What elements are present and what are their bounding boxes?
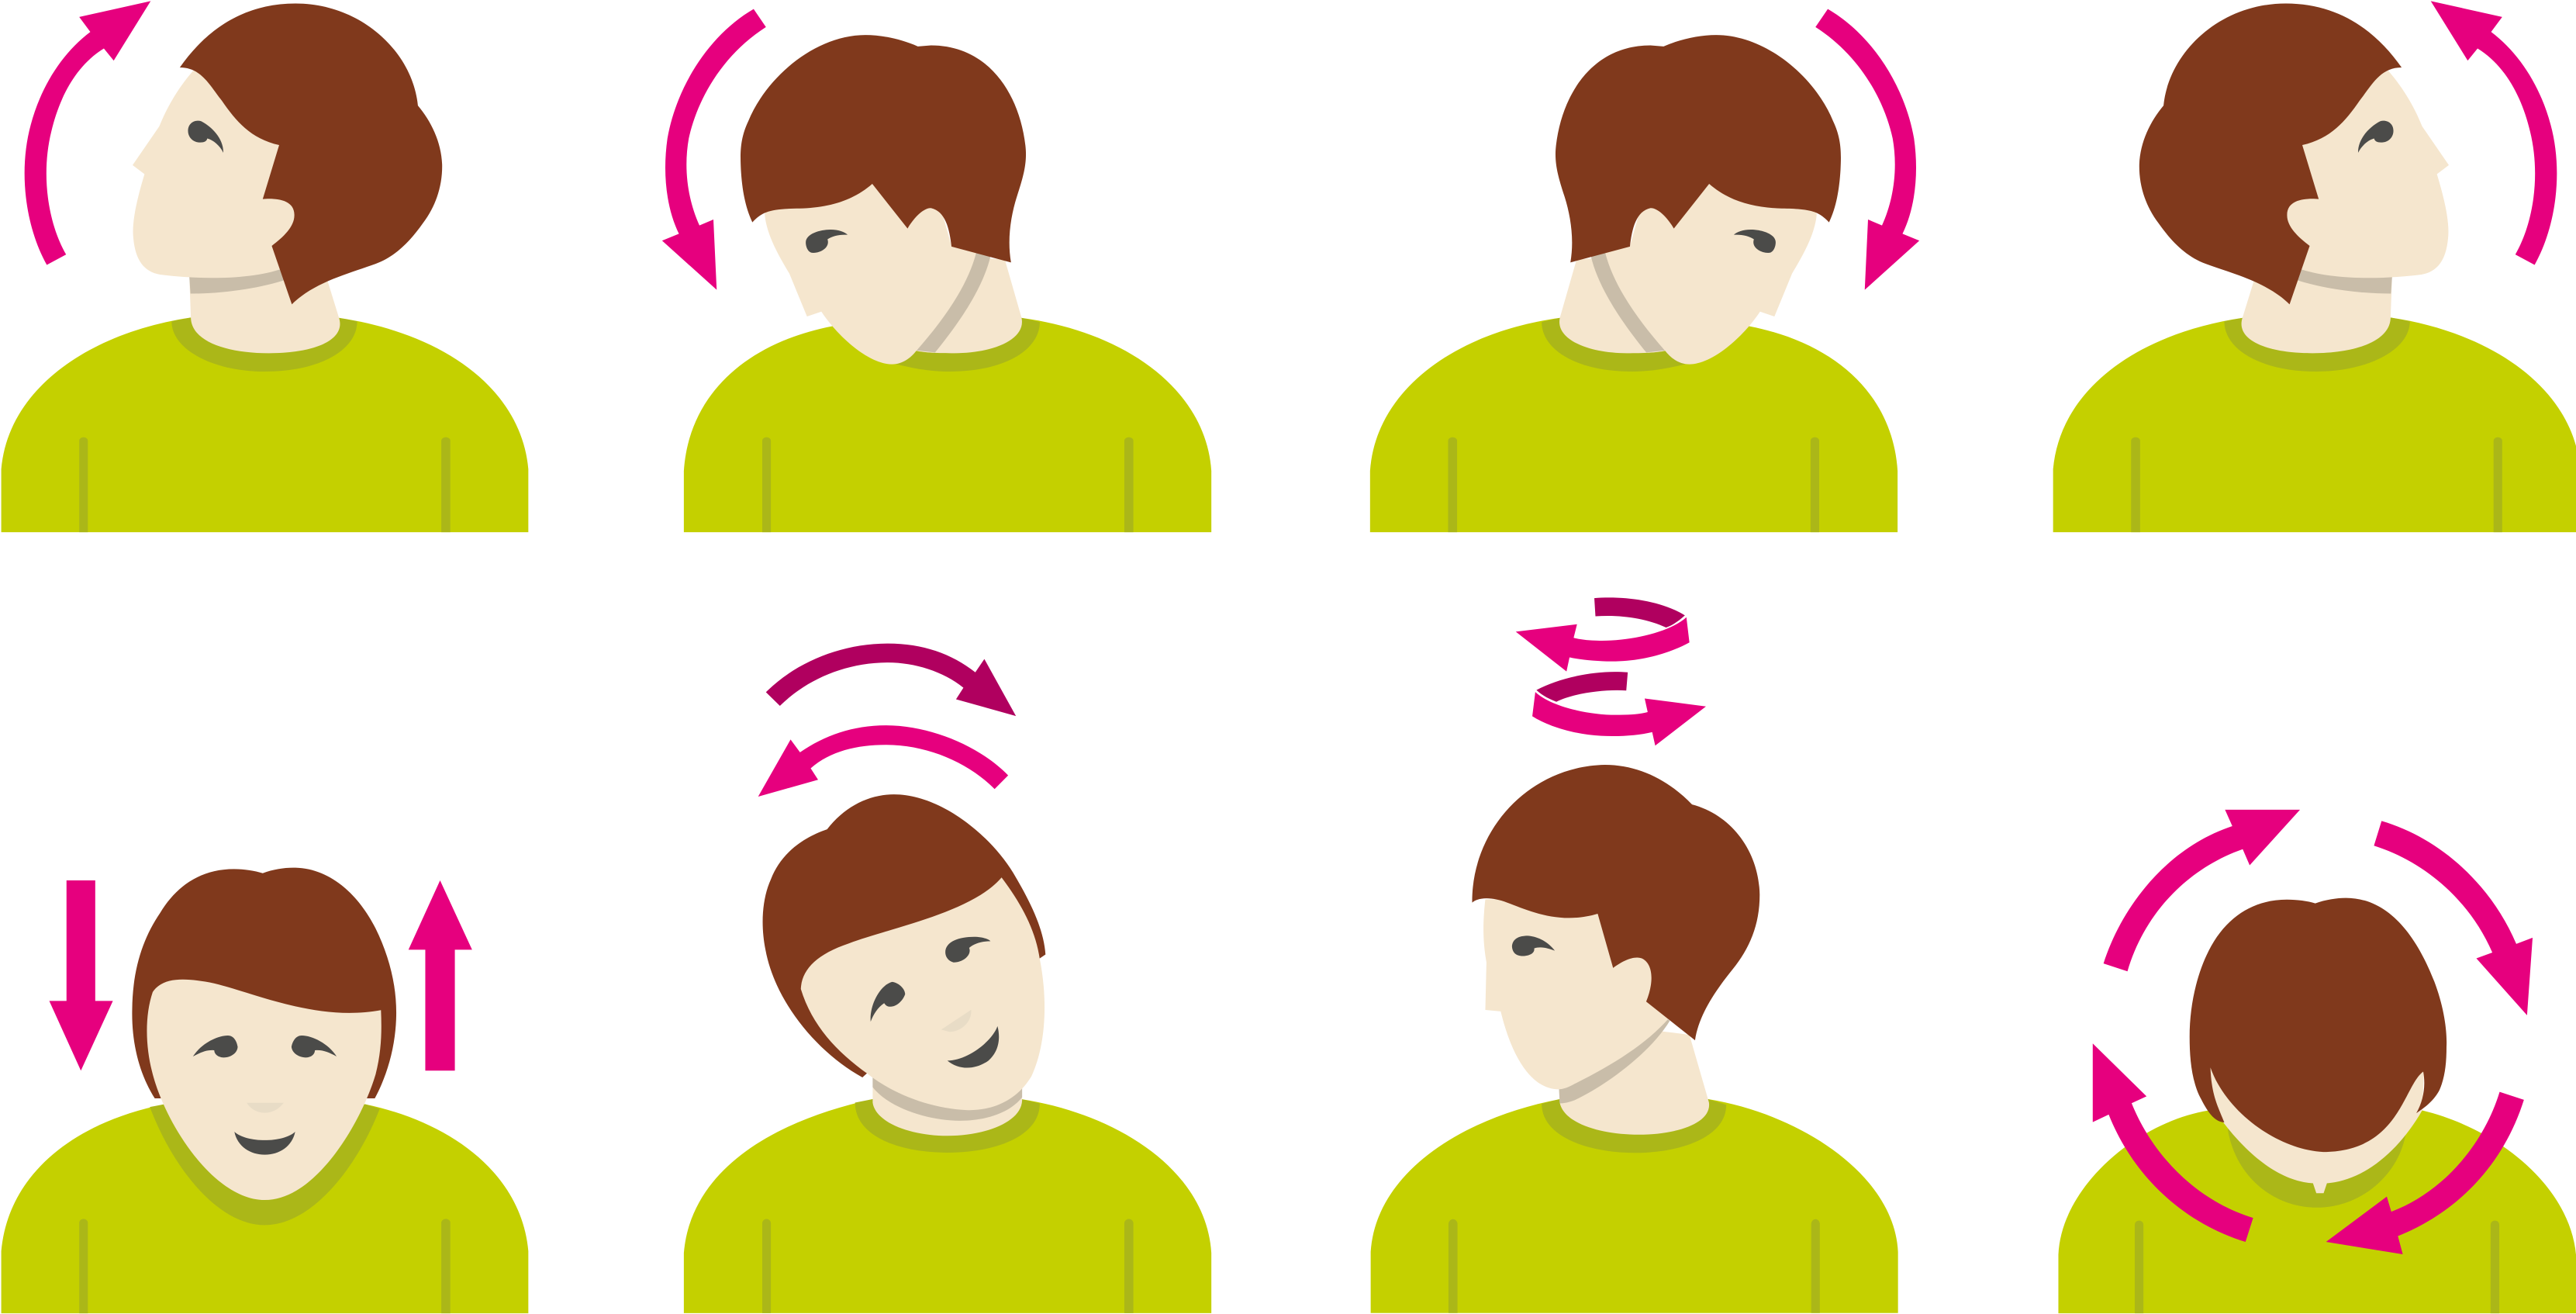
neck shadow [1591, 253, 1665, 352]
face [1605, 173, 1817, 365]
neck shadow [2296, 268, 2392, 294]
eye [2358, 121, 2394, 153]
neck [914, 256, 1022, 353]
eye [188, 121, 223, 153]
hair [180, 3, 442, 304]
back hair [132, 868, 396, 1098]
upper eye [945, 937, 990, 963]
eye [1734, 230, 1776, 253]
hair [2190, 898, 2447, 1152]
arrow: bottom-left [2093, 1043, 2253, 1242]
torso [2, 1105, 528, 1313]
neck [2242, 263, 2392, 353]
arrow: up [409, 880, 472, 1070]
face [1483, 899, 1687, 1089]
neck shadow [189, 268, 285, 294]
face [2253, 69, 2449, 278]
eye [806, 230, 848, 253]
torso [1371, 1099, 1898, 1313]
panel: nodding head, front view [2, 868, 528, 1313]
arrow: curved upward [25, 1, 150, 265]
torso [2, 317, 528, 532]
shirt seams [2131, 437, 2502, 532]
shirt seams [762, 1219, 1134, 1313]
nose [247, 1103, 284, 1113]
arrow: curved downward [1815, 9, 1919, 290]
collar [171, 317, 357, 372]
face [2211, 1067, 2424, 1183]
hair [741, 35, 1026, 262]
panel: head bowed, facing right [1370, 9, 1919, 532]
face [765, 173, 976, 365]
torso [684, 1099, 1211, 1313]
panel: head bowed, facing left [662, 9, 1211, 532]
shirt seams [1448, 437, 1819, 532]
shirt seams [79, 437, 451, 532]
shirt seams [1449, 1219, 1820, 1313]
mouth [948, 1026, 999, 1068]
shirt seams [762, 437, 1134, 532]
neck tip [2312, 1181, 2328, 1193]
hair [763, 794, 1045, 1077]
torso [684, 318, 1211, 532]
shirt seams [2135, 1221, 2499, 1313]
face [133, 69, 329, 278]
arrow: curved downward [662, 9, 766, 290]
arrow: top-left [2104, 810, 2300, 971]
arrow: top-right [2374, 821, 2533, 1015]
collar [2228, 1119, 2406, 1208]
panel: head rotating, profile view [1371, 597, 1898, 1313]
collar [150, 1105, 380, 1225]
panel: head circling, bowed [2058, 810, 2576, 1313]
arrow: lower ribbon, to the right [1532, 692, 1706, 745]
hair [2139, 3, 2402, 304]
neck shadow [1559, 1016, 1670, 1103]
arrow: upper ribbon back [1594, 597, 1685, 628]
arrow: down [50, 880, 113, 1070]
neck shadow [917, 253, 990, 352]
hair [1556, 35, 1841, 262]
arrow: curved upward [2431, 1, 2557, 265]
arrow: dark, to the right [766, 644, 1016, 716]
arrow: lower ribbon back [1536, 672, 1628, 702]
eye [1512, 935, 1555, 956]
panel: head tilted sideways [684, 644, 1211, 1313]
face [801, 877, 1045, 1110]
torso [1370, 318, 1897, 532]
lower eye [871, 982, 905, 1022]
left eye [193, 1036, 238, 1057]
torso [2058, 1111, 2576, 1313]
arrow: bottom-right [2326, 1092, 2524, 1254]
panel: head tilted back, facing right [2053, 1, 2576, 532]
collar [1542, 318, 1687, 372]
hair [1472, 765, 1759, 1040]
neck [1559, 1025, 1709, 1135]
face [147, 980, 382, 1200]
collar [2224, 317, 2410, 372]
arrow: pink, to the left [758, 725, 1008, 797]
neck [872, 1076, 1022, 1136]
nose [941, 1010, 972, 1032]
right eye [292, 1036, 337, 1057]
collar [894, 318, 1040, 372]
torso [2053, 317, 2576, 532]
shirt seams [79, 1219, 451, 1313]
collar [1542, 1099, 1726, 1153]
panel: head tilted back, facing left [2, 1, 528, 532]
neck [1559, 256, 1667, 353]
neck [189, 263, 340, 353]
collar [855, 1099, 1040, 1153]
mouth [234, 1132, 295, 1155]
neck shadow [872, 1076, 1022, 1121]
arrow: upper ribbon, to the left [1516, 617, 1690, 672]
